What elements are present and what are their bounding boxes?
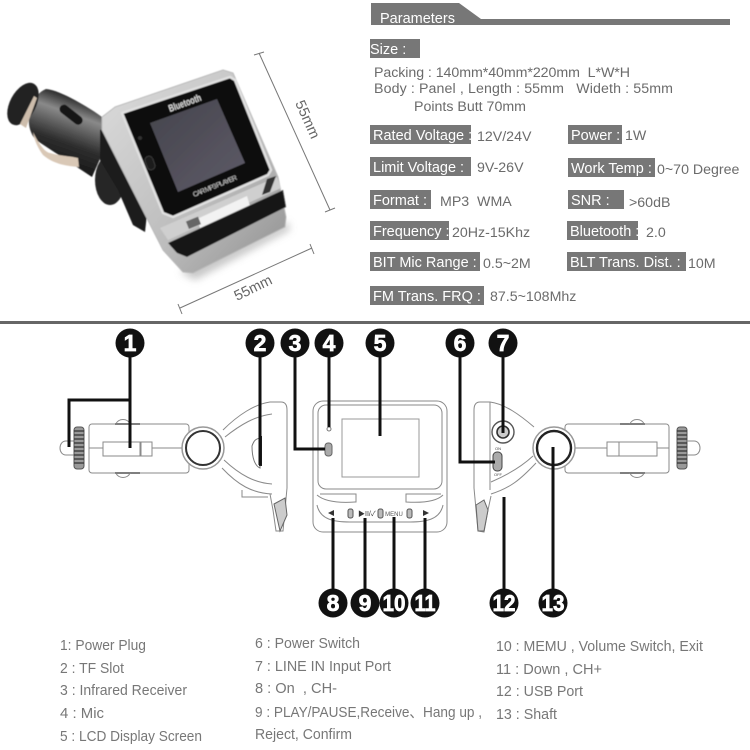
marker 7: 7 — [497, 330, 509, 356]
spec: BIT mic range: BIT Mic Range : — [373, 255, 477, 271]
marker 2 — [246, 328, 274, 358]
legend column 2: 6 : Power Switch — [255, 635, 360, 652]
spec: power: 1W — [625, 128, 647, 144]
height dimension: 55mm — [291, 98, 322, 141]
diagram: right side view: ON — [495, 446, 501, 451]
spec: bluetooth — [567, 221, 666, 241]
spec: dimensions text: Points Butt 70mm — [414, 99, 526, 115]
silver body — [102, 70, 286, 273]
marker 13: 13 — [542, 590, 564, 616]
heading: Parameters — [371, 3, 730, 27]
spec: limit voltage — [370, 157, 524, 176]
spec: dimensions text: Body : Panel , Length : 55mm Wideth : 55mm — [374, 81, 673, 97]
legend column 2: 8 : On , CH- — [255, 680, 337, 697]
marker 1 — [116, 328, 144, 358]
marker 3: 3 — [289, 330, 301, 356]
legend column 3: 12 : USB Port — [496, 683, 584, 700]
product photo: bluetooth car MP3 player — [1, 70, 290, 280]
button symbols — [328, 509, 429, 518]
marker 10: 10 — [382, 590, 406, 616]
spec: size — [370, 39, 420, 58]
spec: limit voltage: Limit Voltage : — [373, 160, 464, 176]
marker 7 — [488, 328, 518, 358]
marker 12: 12 — [492, 590, 516, 616]
infrared receiver — [325, 443, 332, 456]
spec: limit voltage: 9V-26V — [477, 160, 524, 176]
marker 9: 9 — [359, 590, 371, 616]
spec: BIT mic range: 0.5~2M — [483, 256, 531, 272]
marker 5 — [366, 328, 394, 358]
marker 4 — [314, 328, 344, 358]
spec: power: Power : — [571, 128, 620, 144]
legend column 2 — [255, 635, 482, 743]
spec: SNR: >60dB — [629, 195, 670, 211]
legend column 3 — [496, 638, 704, 723]
plug cylinder — [1, 78, 103, 177]
diagram: front view — [313, 401, 447, 532]
spec: rated voltage — [370, 125, 532, 145]
spec: frequency — [370, 221, 530, 241]
marker 9 — [350, 588, 380, 618]
marker 2: 2 — [254, 330, 266, 356]
legend column 1: 5 : LCD Display Screen — [60, 728, 202, 745]
legend column 1: 4 : Mic — [60, 705, 104, 722]
spec: format: Format : — [373, 193, 427, 209]
legend column 1: 1: Power Plug — [60, 637, 146, 654]
legend column 2: 9 : PLAY/PAUSE,Receive、Hang up , — [255, 704, 482, 721]
IR pill — [144, 155, 156, 171]
diagram: right side view — [474, 402, 700, 532]
spec: FM transmission frequency — [370, 286, 576, 305]
mic dot — [138, 136, 142, 140]
legend column 1 — [60, 637, 202, 745]
legend column 3: 10 : MEMU , Volume Switch, Exit — [496, 638, 704, 655]
spec: work temp: Work Temp : — [571, 161, 652, 177]
button symbols: MENU — [385, 512, 403, 518]
model text: CAR MP3 PLAYER — [192, 175, 238, 199]
LCD display outline — [342, 419, 419, 477]
spec: BLT transmission distance: BLT Trans. Dist. : — [570, 255, 681, 271]
callout lines — [69, 343, 553, 603]
LCD screen — [150, 99, 245, 192]
silver strip — [160, 177, 281, 240]
width dimension: 55mm — [232, 273, 275, 305]
width dimension — [178, 244, 314, 314]
spec: FM transmission frequency: 87.5~108Mhz — [490, 289, 576, 305]
marker 8: 8 — [327, 590, 340, 616]
spec: bluetooth: 2.0 — [646, 225, 666, 241]
diagram: left side view — [60, 402, 287, 531]
legend column 1: 3 : Infrared Receiver — [60, 682, 187, 699]
black front panel — [122, 77, 271, 217]
spec: format: MP3 WMA — [440, 194, 512, 210]
spec: work temp: 0~70 Degree — [657, 162, 740, 178]
mic hole — [327, 427, 331, 431]
spec: dimensions text — [374, 65, 673, 115]
marker 5: 5 — [374, 330, 387, 356]
marker 4: 4 — [323, 330, 336, 356]
spec: SNR — [568, 190, 670, 211]
spec: dimensions text: Packing : 140mm*40mm*220mm L*W*H — [374, 65, 630, 81]
spec: SNR: SNR : — [571, 193, 610, 209]
heading: Parameters: Parameters — [380, 11, 455, 27]
spec: FM transmission frequency: FM Trans. FRQ : — [373, 289, 481, 305]
marker 8 — [318, 588, 348, 618]
height dimension — [254, 52, 335, 212]
spec: power — [568, 125, 647, 144]
spec: BLT transmission distance — [567, 252, 716, 272]
spec: rated voltage: 12V/24V — [477, 129, 532, 145]
button symbols: ▶II/✓ — [358, 510, 376, 518]
marker 1: 1 — [124, 330, 137, 356]
spec: format — [370, 190, 512, 210]
button strip — [168, 190, 286, 257]
legend column 3: 13 : Shaft — [496, 706, 558, 723]
spec: rated voltage: Rated Voltage : — [373, 128, 472, 144]
legend column 1: 2 : TF Slot — [60, 660, 125, 677]
legend column 3: 11 : Down , CH+ — [496, 661, 602, 678]
spec: bluetooth: Bluetooth : — [570, 224, 639, 240]
marker 6: 6 — [454, 330, 466, 356]
marker 6 — [446, 328, 474, 358]
spec: BIT mic range — [370, 252, 531, 272]
spec: BLT transmission distance: 10M — [688, 256, 716, 272]
spec: frequency: Frequency : — [373, 224, 450, 240]
legend column 2: 7 : LINE IN Input Port — [255, 658, 392, 675]
marker 11: 11 — [414, 590, 436, 616]
diagram: right side view: OFF — [494, 472, 503, 477]
swivel base — [95, 125, 148, 232]
spec: work temp — [568, 158, 740, 178]
brand text: Bluetooth — [167, 93, 203, 115]
marker 3 — [280, 328, 310, 358]
legend column 2: Reject, Confirm — [255, 726, 352, 743]
spec: frequency: 20Hz-15Khz — [452, 225, 530, 241]
spec: size: Size : — [370, 42, 406, 58]
